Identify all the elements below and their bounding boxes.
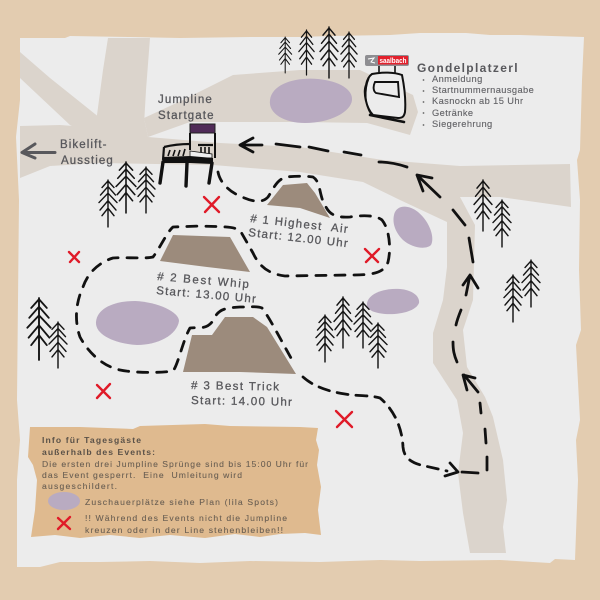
legend: red cross warning: !! Während des Events nicht die Jumpline — [85, 513, 287, 523]
legend: spectator spot: Zuschauerplätze siehe Plan (lila Spots) — [85, 497, 278, 507]
arrow: upward — [463, 275, 478, 295]
label: #1 Highest Air: Start: 12.00 Uhr — [248, 227, 349, 250]
legend: red cross warning: kreuzen oder in der Line stehenbleiben!! — [85, 525, 283, 535]
tree group: centre — [316, 297, 387, 368]
road: vertical from top — [95, 38, 150, 150]
label: Jumpline Startgate: Jumpline — [158, 94, 213, 106]
label: #2 Best Whip: Start: 13.00 Uhr — [156, 285, 257, 306]
trees — [27, 27, 540, 368]
panel: visitor info — [28, 424, 321, 538]
spot: top — [270, 79, 352, 123]
road: upper branch to gondola — [144, 70, 418, 137]
cross 2 — [69, 252, 79, 262]
cross 3 — [365, 249, 379, 262]
mountain: best trick — [183, 317, 296, 374]
info body: ausgeschildert. — [42, 481, 117, 491]
road: main horizontal band and descending track — [20, 118, 571, 553]
tree group: left — [27, 298, 67, 368]
list: Gondelplatzerl services — [423, 74, 534, 129]
spot: right — [393, 207, 432, 248]
label: #3 Best Trick: Start: 14.00 Uhr — [191, 395, 293, 409]
spot: centre right — [367, 289, 419, 314]
sign: saalbach: saalbach — [380, 58, 406, 65]
course section: return to gate — [240, 138, 407, 167]
info body: Die ersten drei Jumpline Sprünge sind bis 15:00 Uhr für — [42, 459, 308, 469]
label: #3 Best Trick: # 3 Best Trick — [191, 380, 280, 394]
info body: das Event gesperrt. Eine Umleitung wird — [42, 470, 242, 480]
label: #2 Best Whip — [156, 271, 257, 306]
cross 5 — [336, 411, 352, 427]
cross 4 — [97, 384, 110, 398]
list: Gondelplatzerl services: Siegerehrung — [432, 119, 493, 129]
arrow: lower right — [445, 463, 458, 476]
cross 1 — [204, 197, 219, 212]
spot: left — [96, 301, 179, 345]
spectator spots — [96, 79, 432, 345]
heading: Gondelplatzerl: Gondelplatzerl — [417, 61, 519, 75]
red crosses — [69, 197, 379, 427]
label: Bikelift-Ausstieg: Ausstieg — [61, 155, 114, 167]
gate banner — [190, 124, 215, 133]
label: #1 Highest Air — [248, 213, 349, 250]
label: #3 Best Trick — [191, 380, 293, 409]
label: Jumpline Startgate: Startgate — [158, 110, 215, 122]
map roads — [20, 38, 571, 553]
course section: start to whip — [76, 172, 390, 372]
dashed jumpline course — [76, 138, 487, 476]
label: #2 Best Whip: # 2 Best Whip — [157, 271, 250, 291]
list: Gondelplatzerl services: Getränke — [432, 108, 473, 118]
mountains — [160, 183, 330, 374]
label: Bikelift-Ausstieg: Bikelift- — [60, 139, 108, 151]
icon: start gate chair — [160, 124, 215, 186]
course section: upper curve — [417, 175, 473, 262]
icon: gondola — [365, 55, 409, 122]
course section: climb dashes — [453, 310, 487, 473]
info heading: außerhalb des Events: — [42, 447, 155, 457]
tree group: near start gate — [99, 162, 155, 227]
list: Gondelplatzerl services: Anmeldung — [432, 74, 483, 84]
info heading: Info für Tagesgäste — [42, 435, 141, 445]
tree group: right — [474, 180, 540, 322]
arrow: bikelift exit — [22, 144, 55, 158]
course section: trick to finish — [303, 377, 447, 471]
tree group: top — [279, 27, 357, 78]
legend: spectator spot — [48, 492, 278, 510]
mountain: highest air — [267, 183, 330, 218]
road: diagonal upper left — [20, 52, 100, 140]
legend: red cross warning — [58, 513, 287, 535]
mountain: best whip — [160, 235, 250, 272]
label: #1 Highest Air: # 1 Highest Air — [250, 213, 349, 236]
list: Gondelplatzerl services: Kasnockn ab 15 Uhr — [432, 96, 523, 106]
list: Gondelplatzerl services: Startnummernausgabe — [432, 85, 534, 95]
